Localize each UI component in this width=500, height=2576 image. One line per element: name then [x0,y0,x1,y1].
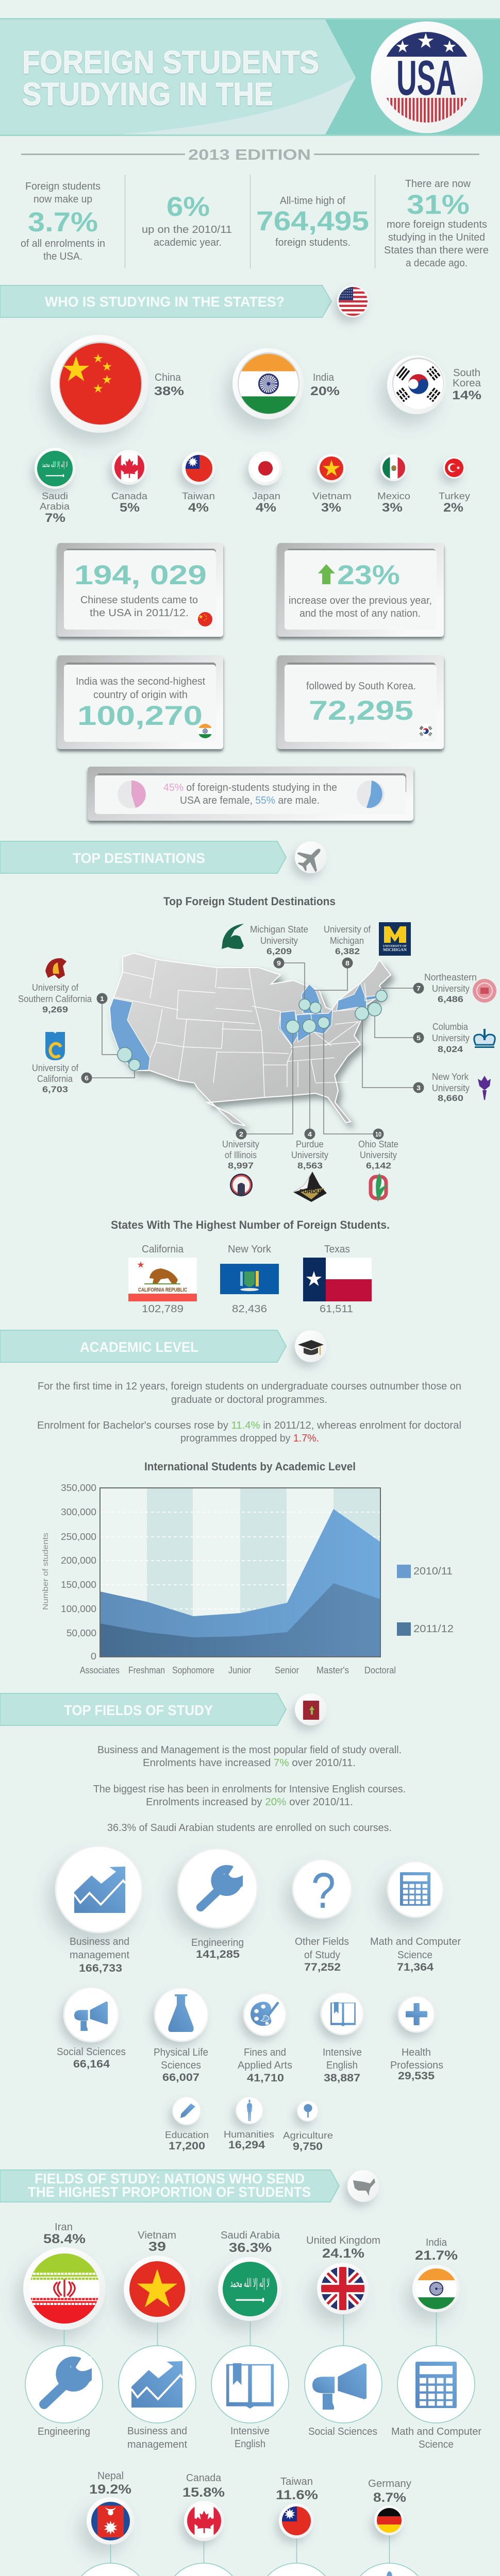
label: Mexico: Mexico [377,491,410,501]
y axis labels [61,1483,96,1662]
y axis labels: 0 [91,1651,96,1662]
x axis labels [80,1665,396,1675]
state: New York [220,1244,279,1315]
section bar: academic level: ACADEMIC LEVEL [80,1339,198,1355]
card: South Korea students: 72,295 [309,696,413,726]
field: agriculture [283,2100,333,2153]
university: Purdue: 8,563 [297,1161,323,1171]
text: top fields intro: Enrolments increased by 20% over 2010/11. [146,1797,353,1808]
university: Michigan [324,922,411,969]
nation: Nepal, Physical Life Sciences: Nepal [97,2470,124,2482]
label: Saudi Arabia: Arabia [40,501,70,512]
card: China students [57,543,223,637]
stat: 3.7%: 3.7% [28,207,98,238]
university: Illinois: 2 [239,1130,243,1138]
university: Michigan: UNIVERSITY OF [383,945,407,948]
label: India: India [313,372,335,383]
card: 23% increase [277,543,444,637]
nation: India, Math and Computer Science [391,2237,481,2450]
stat: 6% [142,192,232,248]
section bar: top fields of study [0,1693,327,1725]
y axis labels: 100,000 [61,1604,96,1614]
text: academic level intro [37,1381,461,1444]
text: academic level intro: For the first time in 12 years, foreign students on undergraduate courses outnumber those on [38,1381,461,1392]
field: agriculture: Agriculture [283,2130,333,2141]
text: top fields intro: Business and Management is the most popular field of study overall. [97,1744,402,1756]
label: China: China [155,372,181,383]
label: Saudi Arabia: Saudi [42,491,68,501]
nation: Germany, Humanities [351,2478,428,2576]
stat: 3.7%: the USA. [43,251,82,262]
card: 23% increase: and the most of any nation. [299,608,421,619]
nation: Saudi Arabia, English [211,2230,289,2450]
stat: 31%: a decade ago. [406,258,468,269]
nation: Canada, Health Professions [165,2472,242,2576]
state: California [128,1244,197,1315]
university: Purdue: PURDUE [299,1189,324,1195]
y axis labels: 50,000 [66,1628,96,1638]
label: Vietnam [312,491,352,515]
icon: graduation cap [295,1330,327,1362]
series: 2010/11 [100,1509,380,1657]
state: Texas: 61,511 [320,1303,353,1315]
stat: 6%: 6% [166,192,210,222]
nation: Nepal, Physical Life Sciences: 19.2% [89,2482,131,2497]
card: 23% increase: 23% [337,560,400,590]
university: Northeastern: University [432,984,470,994]
field: other: 77,252 [304,1961,341,1973]
state: California: 102,789 [142,1303,184,1315]
nation: India, Math and Computer Science: India [426,2237,447,2248]
university: Purdue: University [291,1150,328,1160]
panel: top origin countries [35,335,481,525]
y axis labels: 350,000 [61,1483,96,1493]
stat: 3.7% [21,181,105,262]
label: China: 38% [154,384,184,398]
title [22,45,319,112]
x axis labels: Freshman [128,1665,165,1675]
university: Ohio State: Ohio State [358,1139,398,1149]
nation: Taiwan, Fine and Applied Arts [258,2476,335,2576]
map pins [118,990,387,1071]
university: Michigan State: 6,209 [266,946,292,956]
university: University of California: University of [32,1063,79,1073]
stat: 764,495: 764,495 [256,206,369,236]
field: math and computer science: Science [397,1950,432,1961]
university: Northeastern: 6,486 [438,994,463,1004]
stat: 6%: academic year. [154,237,222,248]
field: social sciences: Social Sciences [57,2046,126,2058]
text: top fields intro: Enrolments have increased 7% over 2010/11. [143,1757,356,1769]
state: New York: 82,436 [232,1303,267,1315]
university: Columbia [413,1022,495,1054]
y axis title: Number of students [41,1533,50,1610]
university: Ohio State [358,1128,398,1202]
state: Texas: Texas [324,1244,350,1255]
legend [397,1565,454,1636]
university: Ohio State: University [360,1150,397,1160]
card: 23% increase: increase over the previous year, [289,595,432,606]
field: math and computer science: 71,364 [397,1961,434,1973]
nation: Vietnam, Business: Business and [127,2426,187,2437]
nation: Taiwan, Fine and Applied Arts: Taiwan [280,2476,313,2487]
flag: Japan [248,451,282,485]
card: China students: the USA in 2011/12. [90,607,189,619]
stat: 3.7%: now make up [34,194,92,205]
field: intensive english [321,1992,363,2084]
flag: Taiwan [182,452,215,485]
label: Vietnam: 3% [321,501,341,515]
university: University of California [32,1032,92,1094]
x axis labels: Master's [316,1665,349,1675]
field: business and management [56,1846,142,1974]
nation: United Kingdom, Social Sciences: Social Sciences [308,2426,377,2437]
title: FOREIGN STUDENTS [22,45,319,80]
card: China students: Chinese students came to [80,595,198,606]
state: California: CALIFORNIA REPUBLIC [138,1287,187,1293]
nation: Vietnam, Business: Vietnam [138,2230,176,2241]
nation: Iran, Engineering: 58.4% [43,2232,86,2246]
text: top fields intro: 36.3% of Saudi Arabian students are enrolled on such courses. [107,1822,392,1834]
university: Purdue: Purdue [296,1139,324,1149]
icon: US flag [337,285,369,317]
label: Mexico: 3% [382,501,403,515]
edition heading [21,147,479,163]
nation: Iran, Engineering: Engineering [38,2426,90,2437]
heading: chart title: International Students by Academic Level [144,1460,356,1473]
field: other: ? [311,1862,336,1919]
university: NYU: 3 [416,1084,421,1092]
section bar: academic level [0,1330,327,1362]
field: health professions: Health [402,2047,431,2058]
label: Japan: 4% [256,501,276,515]
university: Michigan: 8 [345,959,349,967]
card: South Korea students [277,655,444,749]
flag: Saudi Arabia [35,448,76,489]
field: intensive english: 38,887 [324,2072,360,2084]
section bar: top destinations [0,840,329,877]
x axis labels: Doctoral [364,1665,396,1675]
edition heading: 2013 EDITION [188,147,311,163]
university: Michigan State: 9 [277,959,281,967]
nation: United Kingdom, Social Sciences: United Kingdom [306,2235,380,2246]
university: Northeastern: Northeastern [424,972,477,982]
section bar: nations by field: FIELDS OF STUDY: NATIONS WHO SEND [35,2171,305,2187]
university: Ohio State: 6,142 [366,1161,391,1171]
stat: 764,495 [256,195,369,248]
nation: Saudi Arabia, English: Intensive [230,2426,270,2437]
title: STUDYING IN THE [22,77,273,112]
x axis labels: Senior [275,1665,299,1675]
field: education: Education [165,2130,209,2140]
label: Taiwan [182,491,215,515]
field: education: 17,200 [169,2140,205,2152]
y axis labels: 250,000 [61,1532,96,1542]
series: 2011/12 [100,1583,380,1657]
pie: female [118,781,146,808]
stat: 31%: States than there were [384,245,489,256]
nation: Canada, Health Professions: Canada [186,2472,222,2484]
university: Columbia: 8,024 [438,1044,463,1054]
field: intensive english: Intensive [323,2047,362,2058]
field: business and management: Business and [70,1936,129,1947]
stats row [21,175,489,269]
nation: Taiwan, Fine and Applied Arts: 11.6% [276,2488,318,2502]
field: other: of Study [304,1950,340,1961]
field: business and management: 166,733 [79,1962,122,1974]
university: USC: 1 [100,995,104,1003]
state: Texas [303,1244,372,1315]
field: fine and applied arts: Fines and [244,2047,286,2058]
x axis labels: Sophomore [172,1665,214,1675]
field: intensive english: English [326,2060,358,2071]
stat: 3.7%: of all enrolments in [21,238,105,249]
card: gender split [88,767,413,821]
card: gender split: USA are female, 55% are male. [180,795,320,806]
nation: Canada, Health Professions: 15.8% [182,2485,225,2500]
nation: United Kingdom, Social Sciences [305,2235,382,2437]
icon: plane [292,840,329,877]
section bar: top destinations: TOP DESTINATIONS [73,850,205,866]
x axis labels: Junior [228,1665,251,1675]
university: USC: University of [32,982,79,993]
field: engineering [178,1849,257,1960]
section bar: top fields of study: TOP FIELDS OF STUDY [64,1702,213,1718]
nation: India, Math and Computer Science: Science [419,2439,454,2450]
university: NYU [413,1072,491,1103]
university: Illinois: University [222,1139,259,1149]
university: Purdue: 4 [308,1130,312,1138]
university: NYU: New York [432,1072,469,1082]
label: South Korea [452,367,481,402]
field: physical life sciences: Sciences [161,2060,201,2071]
text: top fields intro [93,1744,406,1834]
flag: Vietnam [317,454,346,483]
stat: 31%: There are now [405,178,471,190]
legend: 2011/12 [413,1623,454,1635]
label: Saudi Arabia: 7% [45,511,65,525]
label: South Korea: 14% [452,388,481,402]
label: Japan: Japan [252,491,280,501]
nation: Saudi Arabia, English: 36.3% [229,2241,272,2255]
nation: Vietnam, Business: management [127,2439,187,2450]
label: Turkey: 2% [443,501,463,515]
university: Illinois: 8,997 [228,1161,254,1171]
nation: Vietnam, Business [119,2230,196,2450]
flag: Canada [112,450,147,485]
card: China students: 194, 029 [74,560,207,590]
y axis labels: 300,000 [61,1507,96,1517]
field: other [293,1859,352,1973]
state: California: California [142,1244,184,1255]
nation: Iran, Engineering [23,2222,106,2437]
label: South Korea: Korea [453,378,481,389]
university: University of California: 6,703 [42,1084,68,1094]
university: NYU: University [432,1083,470,1093]
field: agriculture: 9,750 [293,2141,323,2153]
nation: Saudi Arabia, English: English [235,2438,265,2450]
flag: Mexico [380,454,407,481]
field: engineering: 141,285 [196,1948,240,1960]
university: USC [18,958,107,1014]
field: physical life sciences [154,1988,208,2083]
field: social sciences [57,1987,126,2070]
nation: India, Math and Computer Science: 21.7% [415,2248,458,2263]
university: Michigan State: Michigan State [250,924,308,935]
nation: United Kingdom, Social Sciences: 24.1% [322,2246,364,2261]
label: India [310,372,340,398]
university: Michigan State [222,924,308,969]
university: Illinois: of Illinois [225,1150,257,1160]
nation: India, Math and Computer Science: Math and Computer [391,2426,481,2437]
label: Canada [111,491,148,515]
label: South Korea: South [453,367,480,379]
university: Michigan State: University [260,936,298,946]
university: University of California: California [37,1074,73,1084]
label: India: 20% [310,384,340,398]
label: Turkey: Turkey [439,491,470,501]
nation: Nepal, Physical Life Sciences [72,2470,149,2576]
field: fine and applied arts: Applied Arts [238,2060,292,2071]
section bar: nations by field [0,2170,379,2202]
stat: 31%: studying in the United [388,232,485,243]
field: fine and applied arts: 41,710 [247,2072,284,2084]
nation: Iran, Engineering: Iran [55,2222,73,2233]
university: Michigan: Michigan [330,936,364,946]
university: Northeastern [413,972,496,1004]
card: India students: 100,270 [77,701,203,731]
university: University of California: 6 [85,1074,89,1082]
flag: South Korea [387,355,446,414]
university: Michigan: MICHIGAN [383,947,407,952]
field: humanities: Humanities [224,2129,274,2140]
nation: Germany, Humanities: 8.7% [373,2490,406,2505]
section bar: who is studying [0,285,369,317]
field: humanities: 16,294 [228,2139,265,2151]
university: Michigan: University of [324,924,371,935]
legend: 2010/11 [413,1566,453,1577]
label: Taiwan: Taiwan [182,491,215,501]
university: Illinois [222,1128,259,1196]
flag: India [232,348,304,419]
USA badge [371,22,482,133]
stat: 31% [384,178,489,269]
label: Canada: 5% [120,501,140,515]
field: engineering: Engineering [191,1937,244,1948]
field: education [165,2097,209,2152]
label: Turkey [439,491,470,515]
section bar: nations by field: THE HIGHEST PROPORTION OF STUDENTS [28,2184,311,2200]
USA badge: USA [396,50,456,106]
card: gender split: 45% of foreign-students studying in the [163,782,337,793]
field: fine and applied arts [238,1993,292,2084]
card: India students: country of origin with [93,689,188,701]
card: South Korea students: followed by South Korea. [306,681,416,692]
university: Northeastern: 7 [416,985,421,992]
label: Taiwan: 4% [188,501,209,515]
university: Columbia: University [432,1033,470,1043]
y axis labels: 200,000 [61,1555,96,1566]
highlighted states [110,983,378,1071]
flag: China [51,335,148,433]
label: Mexico [377,491,410,515]
map connectors [87,963,419,1134]
field: physical life sciences: 66,007 [162,2072,199,2083]
field: health professions [390,1996,443,2082]
section bar: who is studying: WHO IS STUDYING IN THE STATES? [45,294,285,310]
stat: 6%: up on the 2010/11 [142,224,232,235]
field: math and computer science: Math and Computer [370,1936,461,1947]
stat: 764,495: foreign students. [275,237,351,248]
field: business and management: management [70,1950,129,1961]
university: Purdue [291,1128,328,1202]
flag: Turkey [443,457,465,479]
university: NYU: 8,660 [438,1093,463,1103]
university: Michigan: 6,382 [335,946,360,956]
field: math and computer science [370,1861,461,1973]
label: Vietnam: Vietnam [312,491,352,501]
field: health professions: 29,535 [398,2070,435,2082]
field: physical life sciences: Physical Life [154,2047,208,2058]
university: USC: Southern California [18,994,92,1004]
text: academic level intro: Enrolment for Bachelor's courses rose by 11.4% in 2011/12, whereas enrolment for doctoral [37,1420,461,1431]
nation: Germany, Humanities: Germany [368,2478,411,2489]
nation: Saudi Arabia, English: Saudi Arabia [221,2230,280,2241]
label: Japan [252,491,280,515]
area chart [41,1483,454,1675]
card: India students: India was the second-highest [76,676,205,687]
field: humanities [224,2097,274,2151]
label: Canada: Canada [111,491,148,501]
field: other: Other Fields [295,1936,349,1947]
university: Ohio State: 10 [375,1130,381,1138]
x axis labels: Associates [80,1665,120,1675]
text: top fields intro: The biggest rise has been in enrolments for Intensive English courses. [93,1784,406,1795]
nation: Vietnam, Business: 39 [148,2240,166,2254]
map: United States [110,953,391,1126]
header banner [0,18,500,136]
stat: 31%: more foreign students [387,219,487,230]
stat: 3.7%: Foreign students [25,181,101,192]
pie: male [357,781,385,808]
heading: top destinations: Top Foreign Student Destinations [163,895,336,908]
text: academic level intro: programmes dropped by 1.7%. [180,1433,319,1444]
university: Columbia: 5 [416,1034,421,1042]
state: New York: New York [228,1244,272,1255]
stat: 31%: 31% [407,190,470,220]
field: health professions: Professions [390,2060,443,2071]
field: social sciences: 66,164 [73,2058,110,2070]
y axis labels: 150,000 [61,1580,96,1590]
label: China [154,372,184,398]
university: Columbia: Columbia [432,1022,469,1032]
icon: book [295,1693,327,1725]
icon: US map [347,2170,379,2202]
stat: 764,495: All-time high of [280,195,345,207]
label: Saudi Arabia [40,491,70,525]
card: India students [57,655,223,749]
university: USC: 9,269 [42,1005,68,1014]
heading: states: States With The Highest Number of Foreign Students. [111,1218,390,1231]
text: academic level intro: graduate or doctoral programmes. [171,1394,327,1405]
